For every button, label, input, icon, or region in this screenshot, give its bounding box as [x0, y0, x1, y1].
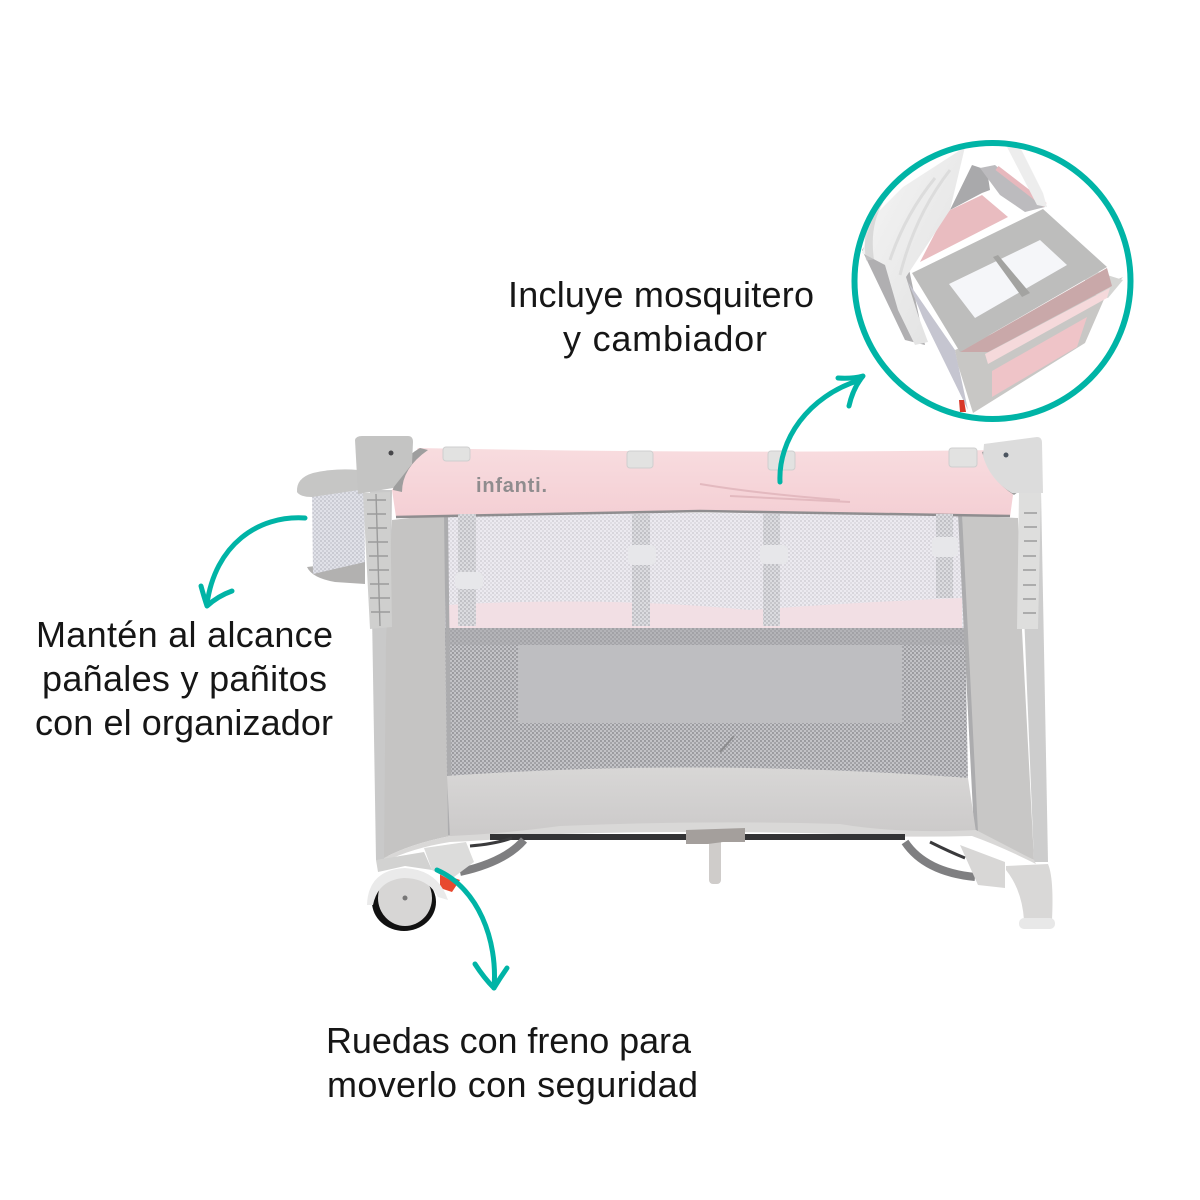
left corner hinge and rack [355, 436, 428, 629]
text: wheels [326, 1020, 698, 1105]
centre support leg [686, 828, 745, 884]
back wall [950, 165, 990, 210]
text: net and changer [508, 274, 814, 359]
lower mesh inner panel [518, 645, 902, 723]
interior below table [960, 268, 1112, 352]
inset photo: mosquito net and changer [850, 140, 1140, 425]
lower mesh [445, 628, 968, 778]
pink pocket [992, 317, 1087, 397]
text: organizer [35, 614, 333, 743]
text: organizer: con el organizador [35, 702, 333, 743]
side wall [908, 282, 968, 410]
text: organizer: pañales y pañitos [42, 658, 327, 699]
mosquito net [862, 147, 965, 345]
right frame pole [1019, 490, 1048, 862]
front body [955, 277, 1123, 413]
top fastening tabs [443, 447, 977, 470]
arrow: to organizer text [201, 518, 305, 606]
strap [993, 255, 1030, 297]
right side fabric panel [958, 515, 1034, 860]
upper mesh window [445, 512, 964, 632]
text: organizer: Mantén al alcance [36, 614, 333, 655]
pink mattress seen through mesh [447, 598, 962, 630]
lever [959, 400, 966, 412]
arrow: to wheels text [437, 870, 507, 988]
left outside of crib [862, 247, 925, 345]
left frame pole [370, 490, 392, 860]
bottom fold [384, 822, 1036, 864]
left wheel with fender and brake [367, 842, 474, 931]
text: wheels: moverlo con seguridad [327, 1064, 698, 1105]
mesh straps and buckles [455, 514, 958, 626]
text: net and changer: y cambiador [563, 318, 767, 359]
brand logo: infanti. [476, 475, 547, 497]
pink rail [985, 288, 1110, 364]
left side fabric panel [384, 514, 450, 858]
white changing sheet [949, 240, 1067, 318]
text: wheels: Ruedas con freno para [326, 1020, 692, 1061]
text: net and changer: Incluye mosquitero [508, 274, 814, 315]
right foot [960, 845, 1055, 929]
product photo: travel crib [297, 436, 1055, 931]
arrow: to inset [780, 376, 863, 482]
undercarriage tubes [460, 837, 975, 877]
lower mesh top strip [445, 628, 965, 645]
pink mattress [920, 195, 1008, 262]
bottom fabric band [447, 767, 976, 838]
inset circle ring [854, 143, 1130, 419]
right corner hinge and rack [982, 437, 1043, 629]
hanging zip [720, 736, 734, 752]
changing pad [912, 209, 1107, 352]
pink top band [392, 447, 1013, 517]
mesh seams [446, 514, 976, 835]
organizer basket [297, 469, 365, 584]
